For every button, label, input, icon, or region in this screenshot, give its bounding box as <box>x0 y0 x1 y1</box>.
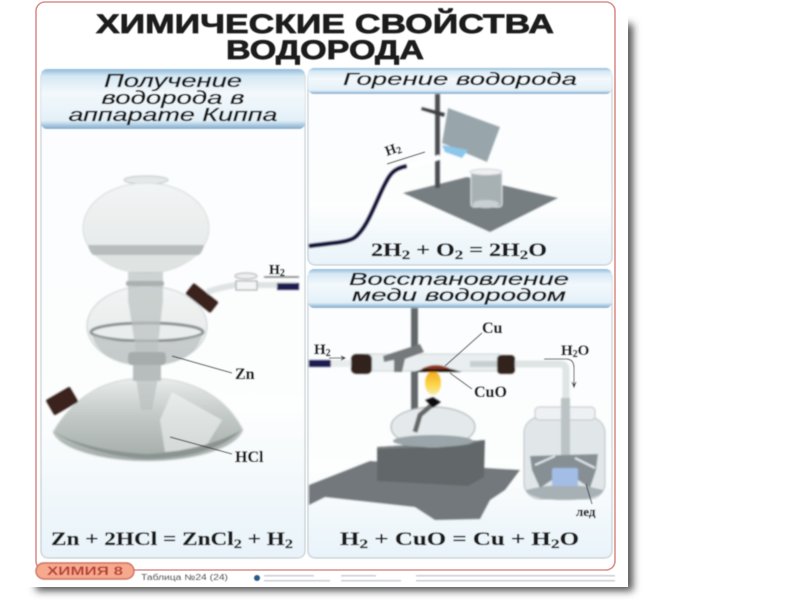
poster frame <box>36 2 615 570</box>
glass tube <box>408 157 440 167</box>
label: Zn: Zn <box>235 366 255 383</box>
panel: hydrogen combustion <box>308 68 612 265</box>
lower dome <box>53 378 243 461</box>
label: HCl: HCl <box>235 449 264 466</box>
badge: Chemistry 8: ХИМИЯ 8 <box>47 564 123 578</box>
label: H2: H <box>383 142 399 160</box>
spirit lamp <box>391 397 475 447</box>
header: reduction: Восстановление <box>349 269 569 289</box>
collection jar <box>524 398 605 500</box>
label: H2: 2 <box>280 268 285 279</box>
equation: combustion: 2H <box>371 241 395 261</box>
beaker <box>470 169 502 208</box>
stopper left <box>45 386 79 416</box>
header: Kipp: аппарате Киппа <box>68 105 278 125</box>
header: Kipp: Получение <box>104 71 242 91</box>
copper oxide <box>414 365 462 372</box>
label: ice: лед <box>576 504 596 519</box>
illustration: Kipp apparatus <box>45 176 299 461</box>
label: H2 inlet: H <box>314 342 326 358</box>
equation: combustion: 2 <box>402 247 410 262</box>
stand rod <box>411 308 418 414</box>
label: Cu: Cu <box>482 320 503 337</box>
equation: combustion: = 2H <box>463 241 521 261</box>
arrow: H2 inlet <box>329 356 345 360</box>
base plate <box>309 461 520 520</box>
header: reduction <box>308 269 612 308</box>
zinc holder <box>128 352 166 365</box>
upper bulb <box>83 176 209 273</box>
illustration: burner setup <box>309 94 558 246</box>
glass plate <box>442 108 500 162</box>
publisher info <box>264 575 615 582</box>
equation: reduction: O <box>560 530 579 550</box>
base plate <box>403 177 558 232</box>
hose <box>309 166 407 246</box>
illustration: reduction setup <box>309 308 605 520</box>
leader: H2 arrow <box>387 152 425 164</box>
panel: copper reduction <box>308 269 612 558</box>
stopper right <box>185 283 219 313</box>
label: H2: H <box>269 263 280 278</box>
header: reduction: меди водородом <box>352 285 566 305</box>
equation: reduction: H <box>340 530 354 550</box>
equation: reduction: + CuO = Cu + H <box>368 530 552 550</box>
funnel stem <box>128 272 163 410</box>
equation: combustion: + O <box>410 241 455 261</box>
publisher logo <box>254 575 260 581</box>
poster shadow <box>36 24 633 591</box>
title: ХИМИЧЕСКИЕ СВОЙСТВА <box>96 8 554 39</box>
leader: Zn <box>172 356 232 373</box>
tube and valve <box>207 273 299 292</box>
label: H2: 2 <box>395 145 404 157</box>
arrow: H2O <box>544 359 576 387</box>
clamp <box>421 107 445 117</box>
equation: Zn: + H <box>242 530 286 550</box>
header: Kipp <box>41 69 305 129</box>
badge: Chemistry 8 <box>36 563 134 579</box>
stand rod <box>435 94 440 188</box>
table number: Таблица №24 (24) <box>141 573 228 582</box>
poster content <box>36 8 615 582</box>
equation: Zn: Zn + 2HCl = ZnCl <box>51 530 196 550</box>
leader: Cu <box>445 333 482 366</box>
flame <box>425 371 441 395</box>
leader: ice <box>586 484 592 504</box>
collar <box>126 281 164 286</box>
neck <box>133 365 161 381</box>
equation: combustion: 2 <box>455 247 463 262</box>
header: combustion <box>308 68 612 94</box>
footer <box>36 563 615 582</box>
title: ВОДОРОДА <box>226 35 424 65</box>
label: H2O: H <box>561 343 573 359</box>
header: combustion: Горение водорода <box>343 69 577 89</box>
stopper left <box>351 354 372 374</box>
vapor <box>442 145 468 158</box>
middle sphere <box>87 286 207 366</box>
equation: Zn: 2 <box>234 536 242 551</box>
leader: CuO <box>450 373 472 389</box>
leader: HCl <box>170 437 232 454</box>
equation: combustion: 2 <box>520 247 528 262</box>
equation: combustion: O <box>528 241 547 261</box>
poster sheet <box>24 0 628 587</box>
title <box>96 8 554 65</box>
outlet tube <box>515 364 566 410</box>
label: H2O: O <box>578 343 589 359</box>
panel: hydrogen in Kipp apparatus <box>41 69 305 558</box>
clamp <box>383 344 424 372</box>
test tube <box>365 354 500 371</box>
label: H2O: 2 <box>573 349 578 360</box>
inlet tube end <box>309 360 331 367</box>
stopper right <box>497 355 515 374</box>
equation: reduction: 2 <box>551 536 560 551</box>
label: CuO: CuO <box>474 384 507 401</box>
heater block <box>377 440 485 486</box>
header: Kipp: водорода в <box>102 88 244 108</box>
equation: reduction: 2 <box>359 536 368 551</box>
equation: Zn: 2 <box>285 536 293 551</box>
label: H2 inlet: 2 <box>326 348 331 359</box>
